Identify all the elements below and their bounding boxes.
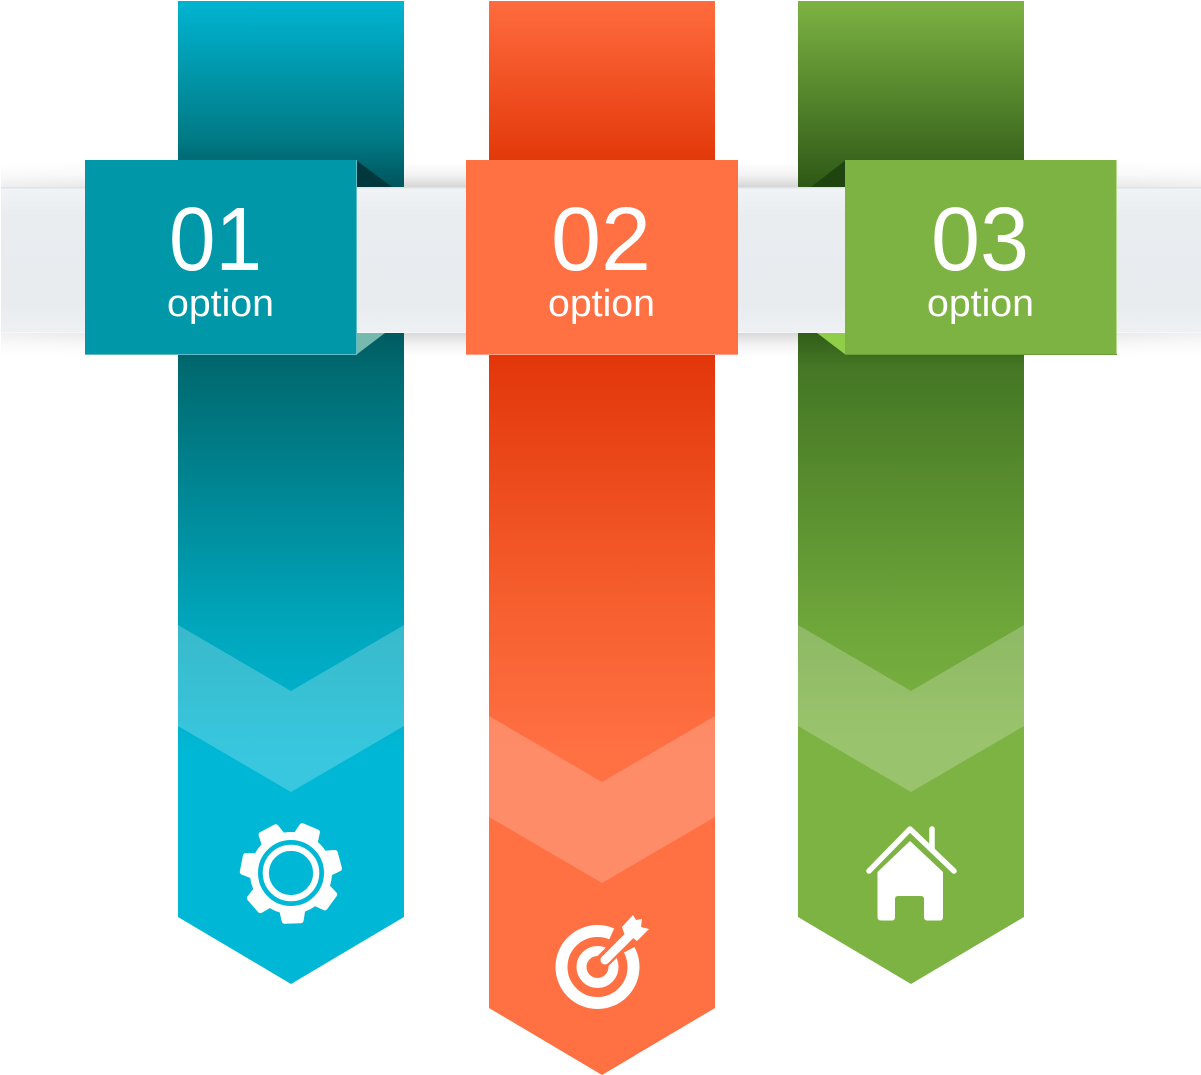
fold: green bottom (817, 333, 846, 355)
panel: option 03 (845, 160, 1117, 355)
label option: option (927, 283, 1034, 325)
fold: green top (811, 160, 846, 187)
chevron: orange (489, 716, 715, 883)
panel: option 02 (466, 160, 738, 355)
ribbon 2: orange arrow (489, 1, 715, 1075)
chevron: blue (178, 625, 404, 792)
horizontal grey band (1, 187, 1201, 333)
ribbon 3: green arrow (798, 1, 1024, 984)
fold: blue bottom (356, 333, 385, 355)
band shadows (1, 163, 1201, 357)
panel: option 01 (85, 160, 357, 355)
chevron: green (798, 625, 1024, 792)
label option: option (167, 283, 274, 325)
number 01: 01 (169, 190, 262, 290)
icon: house (869, 829, 954, 920)
icon: target with arrow (562, 913, 655, 1003)
ribbon 1: blue arrow (178, 1, 404, 984)
number 02: 02 (551, 190, 651, 290)
icon: gear (242, 825, 339, 921)
label option: option (548, 283, 655, 325)
number 03: 03 (931, 190, 1029, 290)
fold: blue top (356, 160, 392, 187)
